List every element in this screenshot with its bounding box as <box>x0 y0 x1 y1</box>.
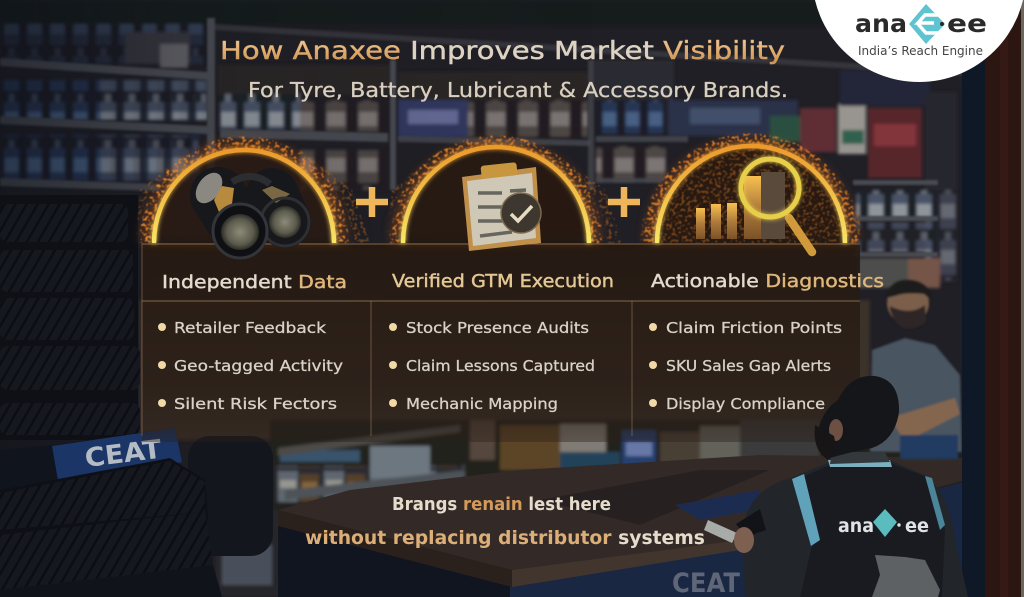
background shopkeeper <box>870 280 962 459</box>
shelves and bottles upper wall <box>0 0 1024 288</box>
column 1 text: Independent Data <box>162 272 347 293</box>
counter <box>278 455 970 597</box>
column 3 text: Display Compliance <box>666 395 825 413</box>
icon: bar chart with magnifier <box>696 159 812 252</box>
column 1 text <box>158 272 347 413</box>
field agent in anaxee vest <box>704 376 968 597</box>
column 2 text: Stock Presence Audits <box>406 319 589 337</box>
arc 1: independent data <box>136 139 370 243</box>
bottom statement <box>305 495 705 549</box>
column 2 text: Verified GTM Execution <box>392 271 614 292</box>
column 3 text: SKU Sales Gap Alerts <box>666 357 831 375</box>
column 2 text: Mechanic Mapping <box>406 395 558 413</box>
icon: clipboard with check <box>462 162 541 251</box>
panel: content table <box>142 243 860 442</box>
icon: plus 1 <box>356 187 388 217</box>
upright tyre <box>188 436 273 556</box>
arc 3: diagnostics <box>640 137 862 243</box>
logo badge: ana <box>855 9 907 38</box>
tyre stacks <box>0 195 273 597</box>
CEAT banner: CEAT <box>83 435 164 474</box>
column 2 text: Claim Lessons Captured <box>406 357 595 375</box>
lower tyre stack <box>0 458 222 597</box>
column 1 text: Silent Risk Fectors <box>174 395 337 413</box>
column 3 text <box>649 271 884 413</box>
upper tyre stack <box>0 195 140 440</box>
column 2 text <box>389 271 614 413</box>
subtitle: For Tyre, Battery, Lubricant & Accessory Brands. <box>248 78 788 102</box>
logo badge: ee <box>947 9 987 38</box>
logo badge <box>812 0 1024 82</box>
background: lower product shelves <box>140 300 960 597</box>
right wall and post <box>962 0 1024 597</box>
logo badge: India’s Reach Engine <box>858 44 983 58</box>
column 3 text: Actionable Diagnostics <box>651 271 884 292</box>
arc 2: verified execution <box>386 139 622 243</box>
vest logo: ana <box>838 515 874 537</box>
bottom statement: without replacing distributor systems <box>305 527 705 549</box>
column 1 text: Retailer Feedback <box>174 319 326 337</box>
icon: plus 2 <box>608 187 640 217</box>
icon: binoculars <box>190 168 309 259</box>
shelf boards <box>0 18 1000 257</box>
bottom statement: Brangs renain lest here <box>392 495 611 515</box>
vest logo: ee <box>905 515 929 537</box>
title: How Anaxee Improves Market Visibility <box>220 36 785 65</box>
vest logo <box>838 509 929 537</box>
CEAT banner <box>0 428 182 492</box>
column 3 text: Claim Friction Points <box>666 319 842 337</box>
column 1 text: Geo-tagged Activity <box>174 357 343 375</box>
